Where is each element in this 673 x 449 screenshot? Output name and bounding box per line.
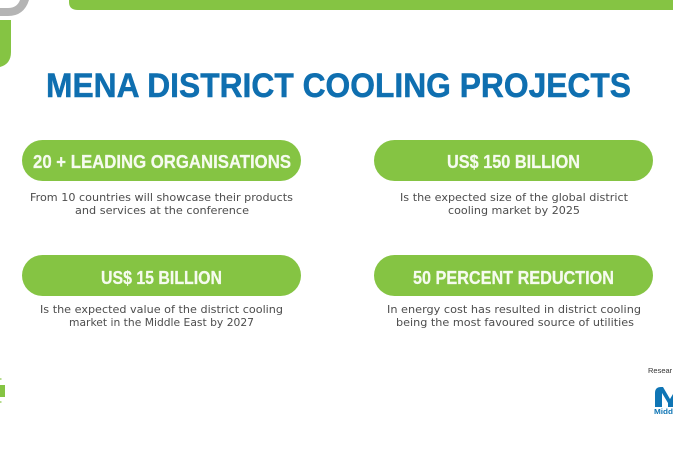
- panel: global market size: cooling market by 2025: [448, 204, 580, 217]
- panel: middle east market value: market in the Middle East by 2027: [69, 316, 254, 329]
- panel: middle east market value: US$ 15 BILLION: [101, 267, 222, 288]
- panel: leading organisations: From 10 countries will showcase their products: [30, 191, 293, 204]
- panel: middle east market value: [22, 255, 301, 329]
- panel: global market size: US$ 150 BILLION: [447, 151, 580, 172]
- panel: global market size: [374, 140, 653, 217]
- logo: research partner: [654, 387, 673, 416]
- title: MENA DISTRICT COOLING PROJECTS: [46, 67, 631, 105]
- panel: energy cost reduction: being the most favoured source of utilities: [396, 316, 634, 329]
- logo fragment: top left: [0, 0, 29, 67]
- panel: global market size: Is the expected size of the global district: [400, 191, 629, 204]
- logo: research partner: Midd: [654, 409, 673, 416]
- panel: leading organisations: [22, 140, 301, 217]
- panel: energy cost reduction: [374, 255, 653, 329]
- panel: leading organisations: and services at the conference: [75, 204, 249, 217]
- panel: energy cost reduction: In energy cost has resulted in district cooling: [387, 303, 641, 316]
- panel: leading organisations: 20 + LEADING ORGANISATIONS: [33, 151, 291, 172]
- panel: middle east market value: Is the expected value of the district cooling: [40, 303, 283, 316]
- top banner bar: [69, 0, 673, 10]
- research partner label: Resear: [648, 366, 673, 375]
- panel: energy cost reduction: 50 PERCENT REDUCTION: [413, 267, 614, 288]
- icon: green fragment left edge: [0, 378, 5, 403]
